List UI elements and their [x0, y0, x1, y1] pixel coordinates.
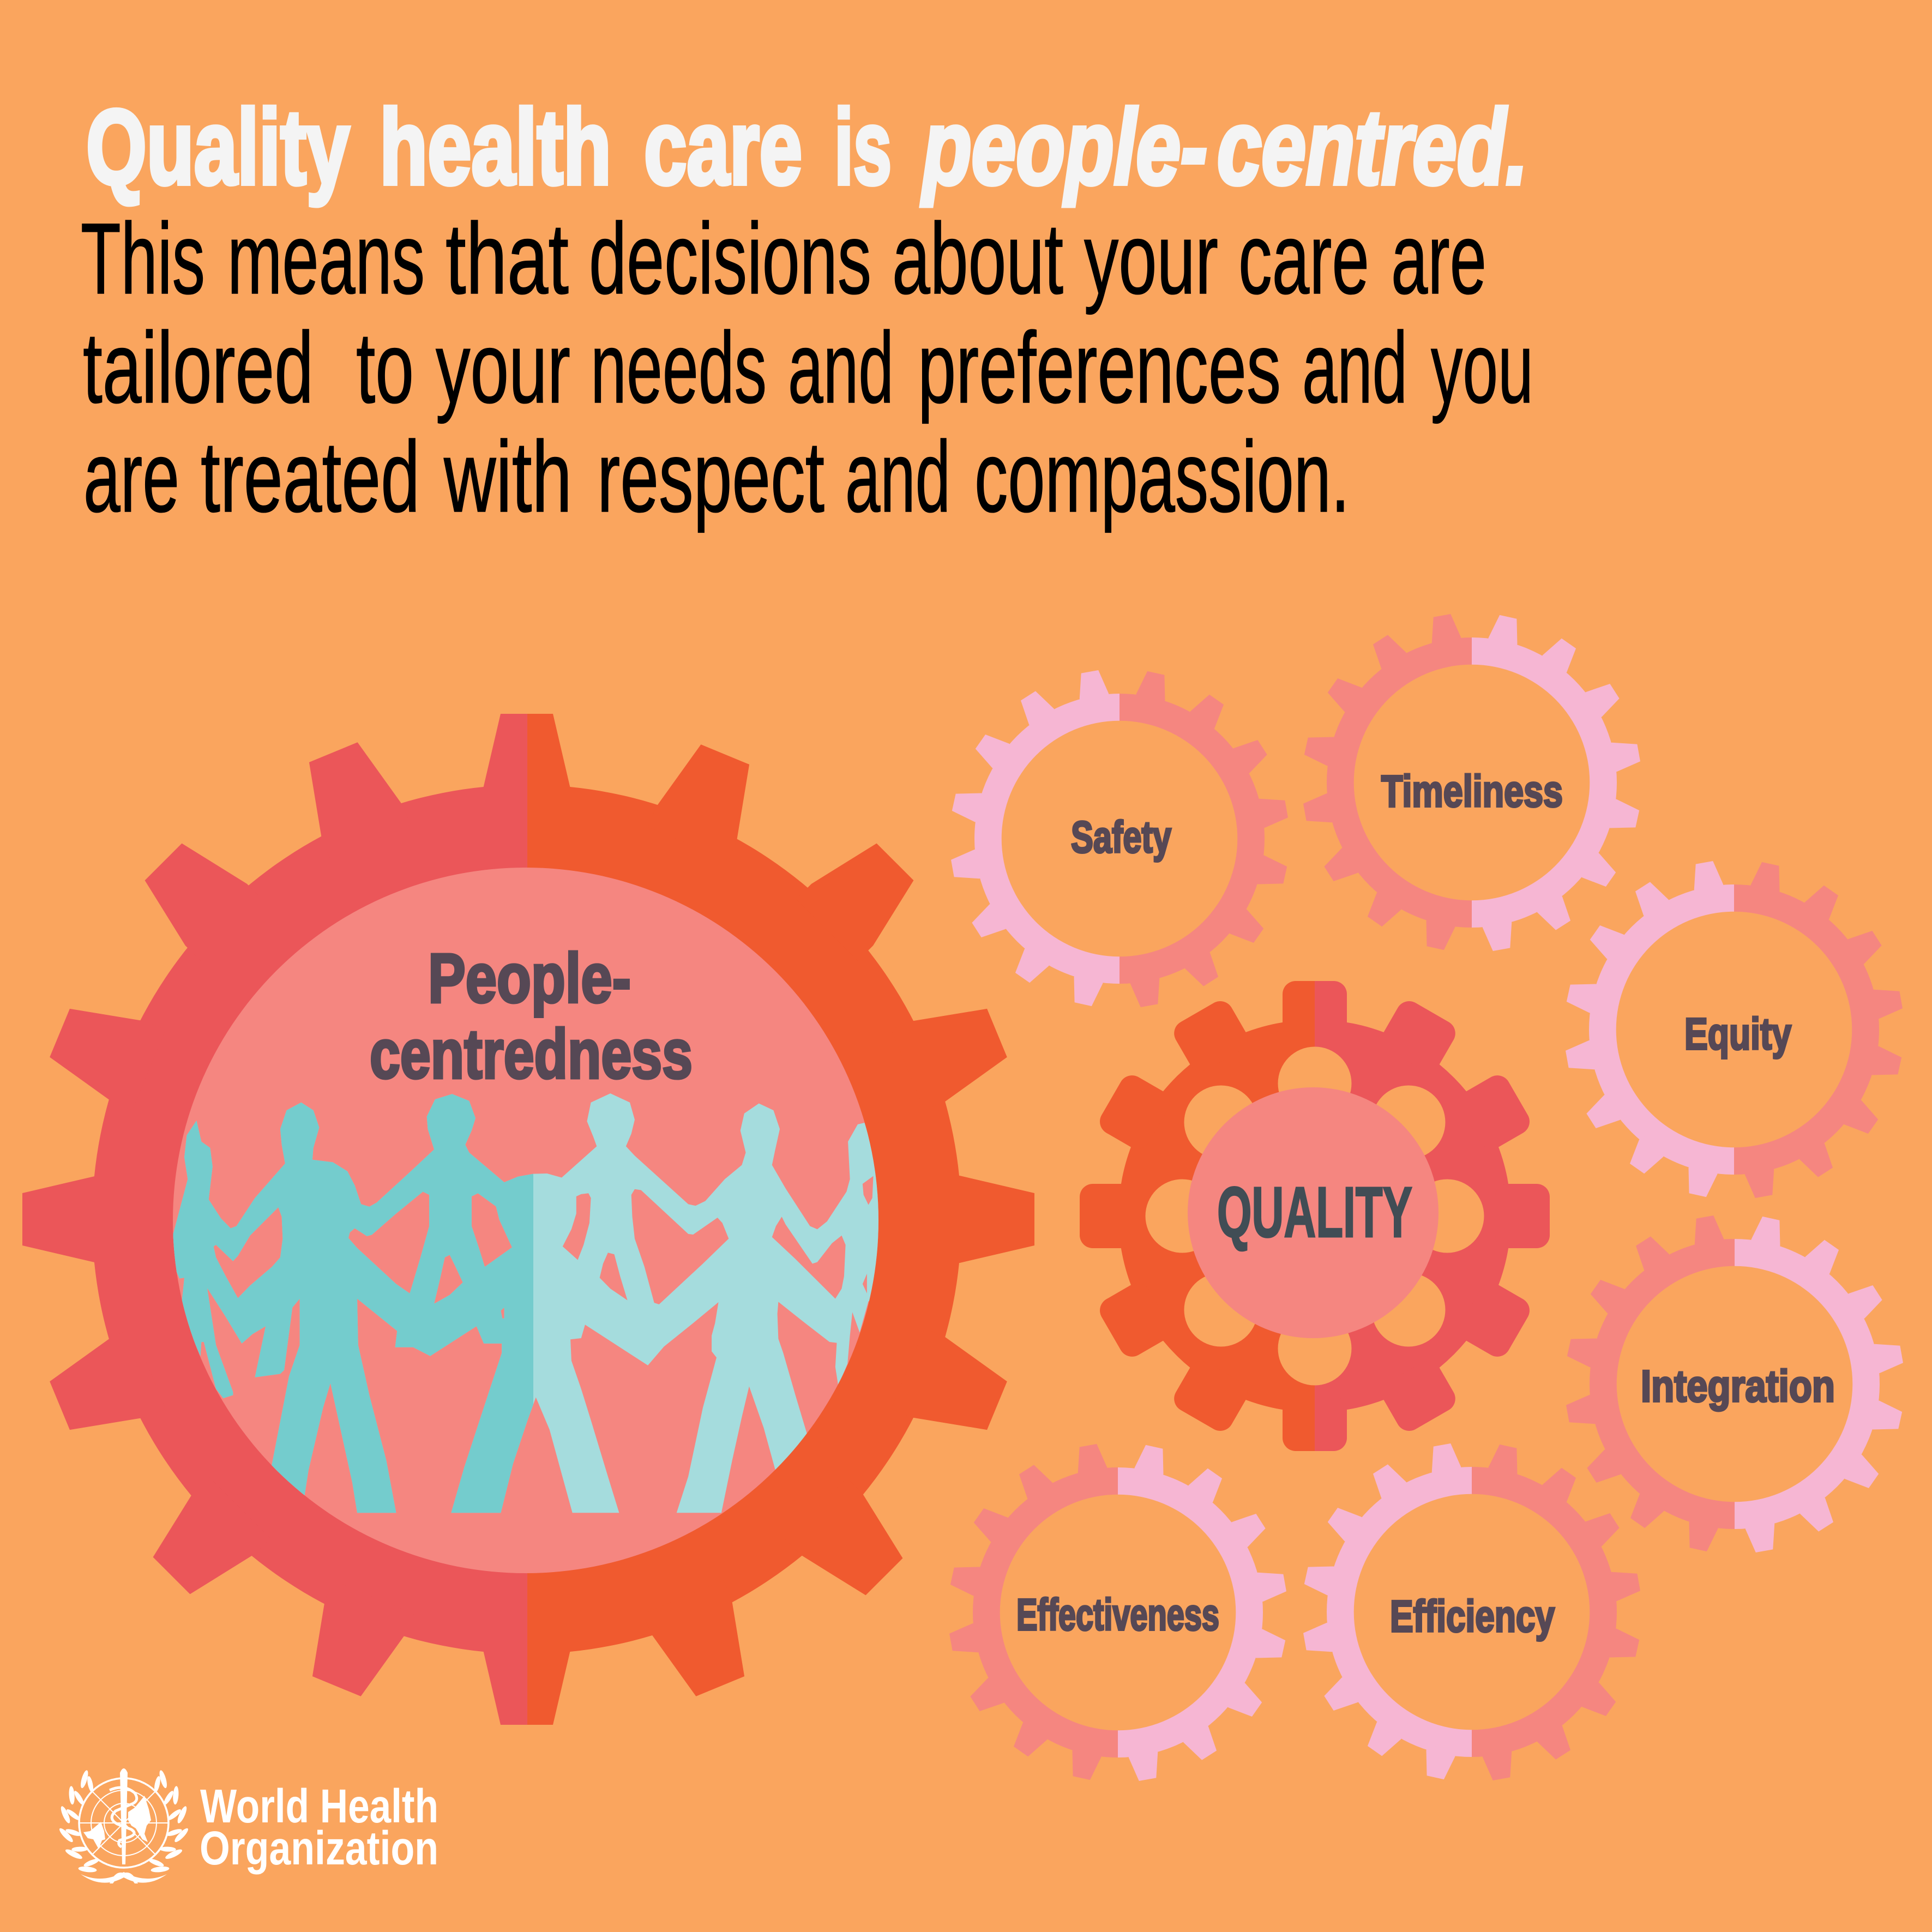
body text: compassion. [974, 421, 1350, 533]
label: people-centredness: People- [428, 940, 631, 1018]
body text: tailored [83, 312, 314, 424]
WHO logo and wordmark [57, 1767, 438, 1883]
small gear: safety [950, 669, 1289, 1008]
body text: with [443, 421, 572, 533]
body text: preferences [918, 312, 1281, 424]
headline [86, 88, 1528, 207]
body text: respect [597, 421, 824, 533]
headline: health [380, 88, 611, 207]
body text: decisions [589, 203, 871, 315]
body text: and [1302, 312, 1407, 424]
wordmark [200, 1780, 438, 1875]
small gear: timeliness: Timeliness [1381, 767, 1563, 816]
body text: needs [591, 312, 767, 424]
small gear: efficiency: Efficiency [1390, 1592, 1555, 1641]
wordmark: World Health [200, 1780, 438, 1833]
headline: Quality [86, 88, 350, 207]
body text [81, 203, 1533, 533]
wordmark: Organization [200, 1822, 438, 1875]
body text: care [1238, 203, 1369, 315]
body text: that [446, 203, 569, 315]
small gear: efficiency [1302, 1442, 1641, 1781]
headline: care [644, 88, 802, 207]
large gear: people-centredness [22, 714, 1034, 1725]
label: people-centredness [370, 940, 693, 1093]
headline: people- [920, 88, 1207, 207]
headline: centred. [1217, 88, 1528, 207]
central gear: quality [1080, 981, 1550, 1451]
body text: and [788, 312, 894, 424]
small gear: effectiveness [948, 1443, 1287, 1782]
icon: WHO emblem [57, 1767, 190, 1883]
small gear: timeliness [1302, 613, 1641, 952]
body text: means [227, 203, 425, 315]
body text: This [81, 203, 205, 315]
body text: are [1391, 203, 1486, 315]
small gear: integration [1565, 1214, 1904, 1554]
small gear: integration: Integration [1641, 1362, 1835, 1411]
heading and intro text [81, 88, 1533, 533]
headline: is [834, 88, 892, 207]
body text: treated [201, 421, 420, 533]
label: people-centredness: centredness [370, 1015, 693, 1093]
label: quality: QUALITY [1217, 1172, 1412, 1252]
small gear: equity: Equity [1684, 1009, 1791, 1059]
paper-chain people silhouettes [167, 1093, 893, 1513]
body text: and [845, 421, 950, 533]
body text: are [83, 421, 179, 533]
small gear: effectiveness: Effectiveness [1016, 1590, 1219, 1640]
small gear: equity [1564, 860, 1904, 1199]
body text: your [436, 312, 570, 424]
body text: to [356, 312, 414, 424]
body text: your [1084, 203, 1218, 315]
body text: you [1431, 312, 1533, 424]
small gear: safety: Safety [1071, 812, 1171, 862]
body text: about [892, 203, 1063, 315]
